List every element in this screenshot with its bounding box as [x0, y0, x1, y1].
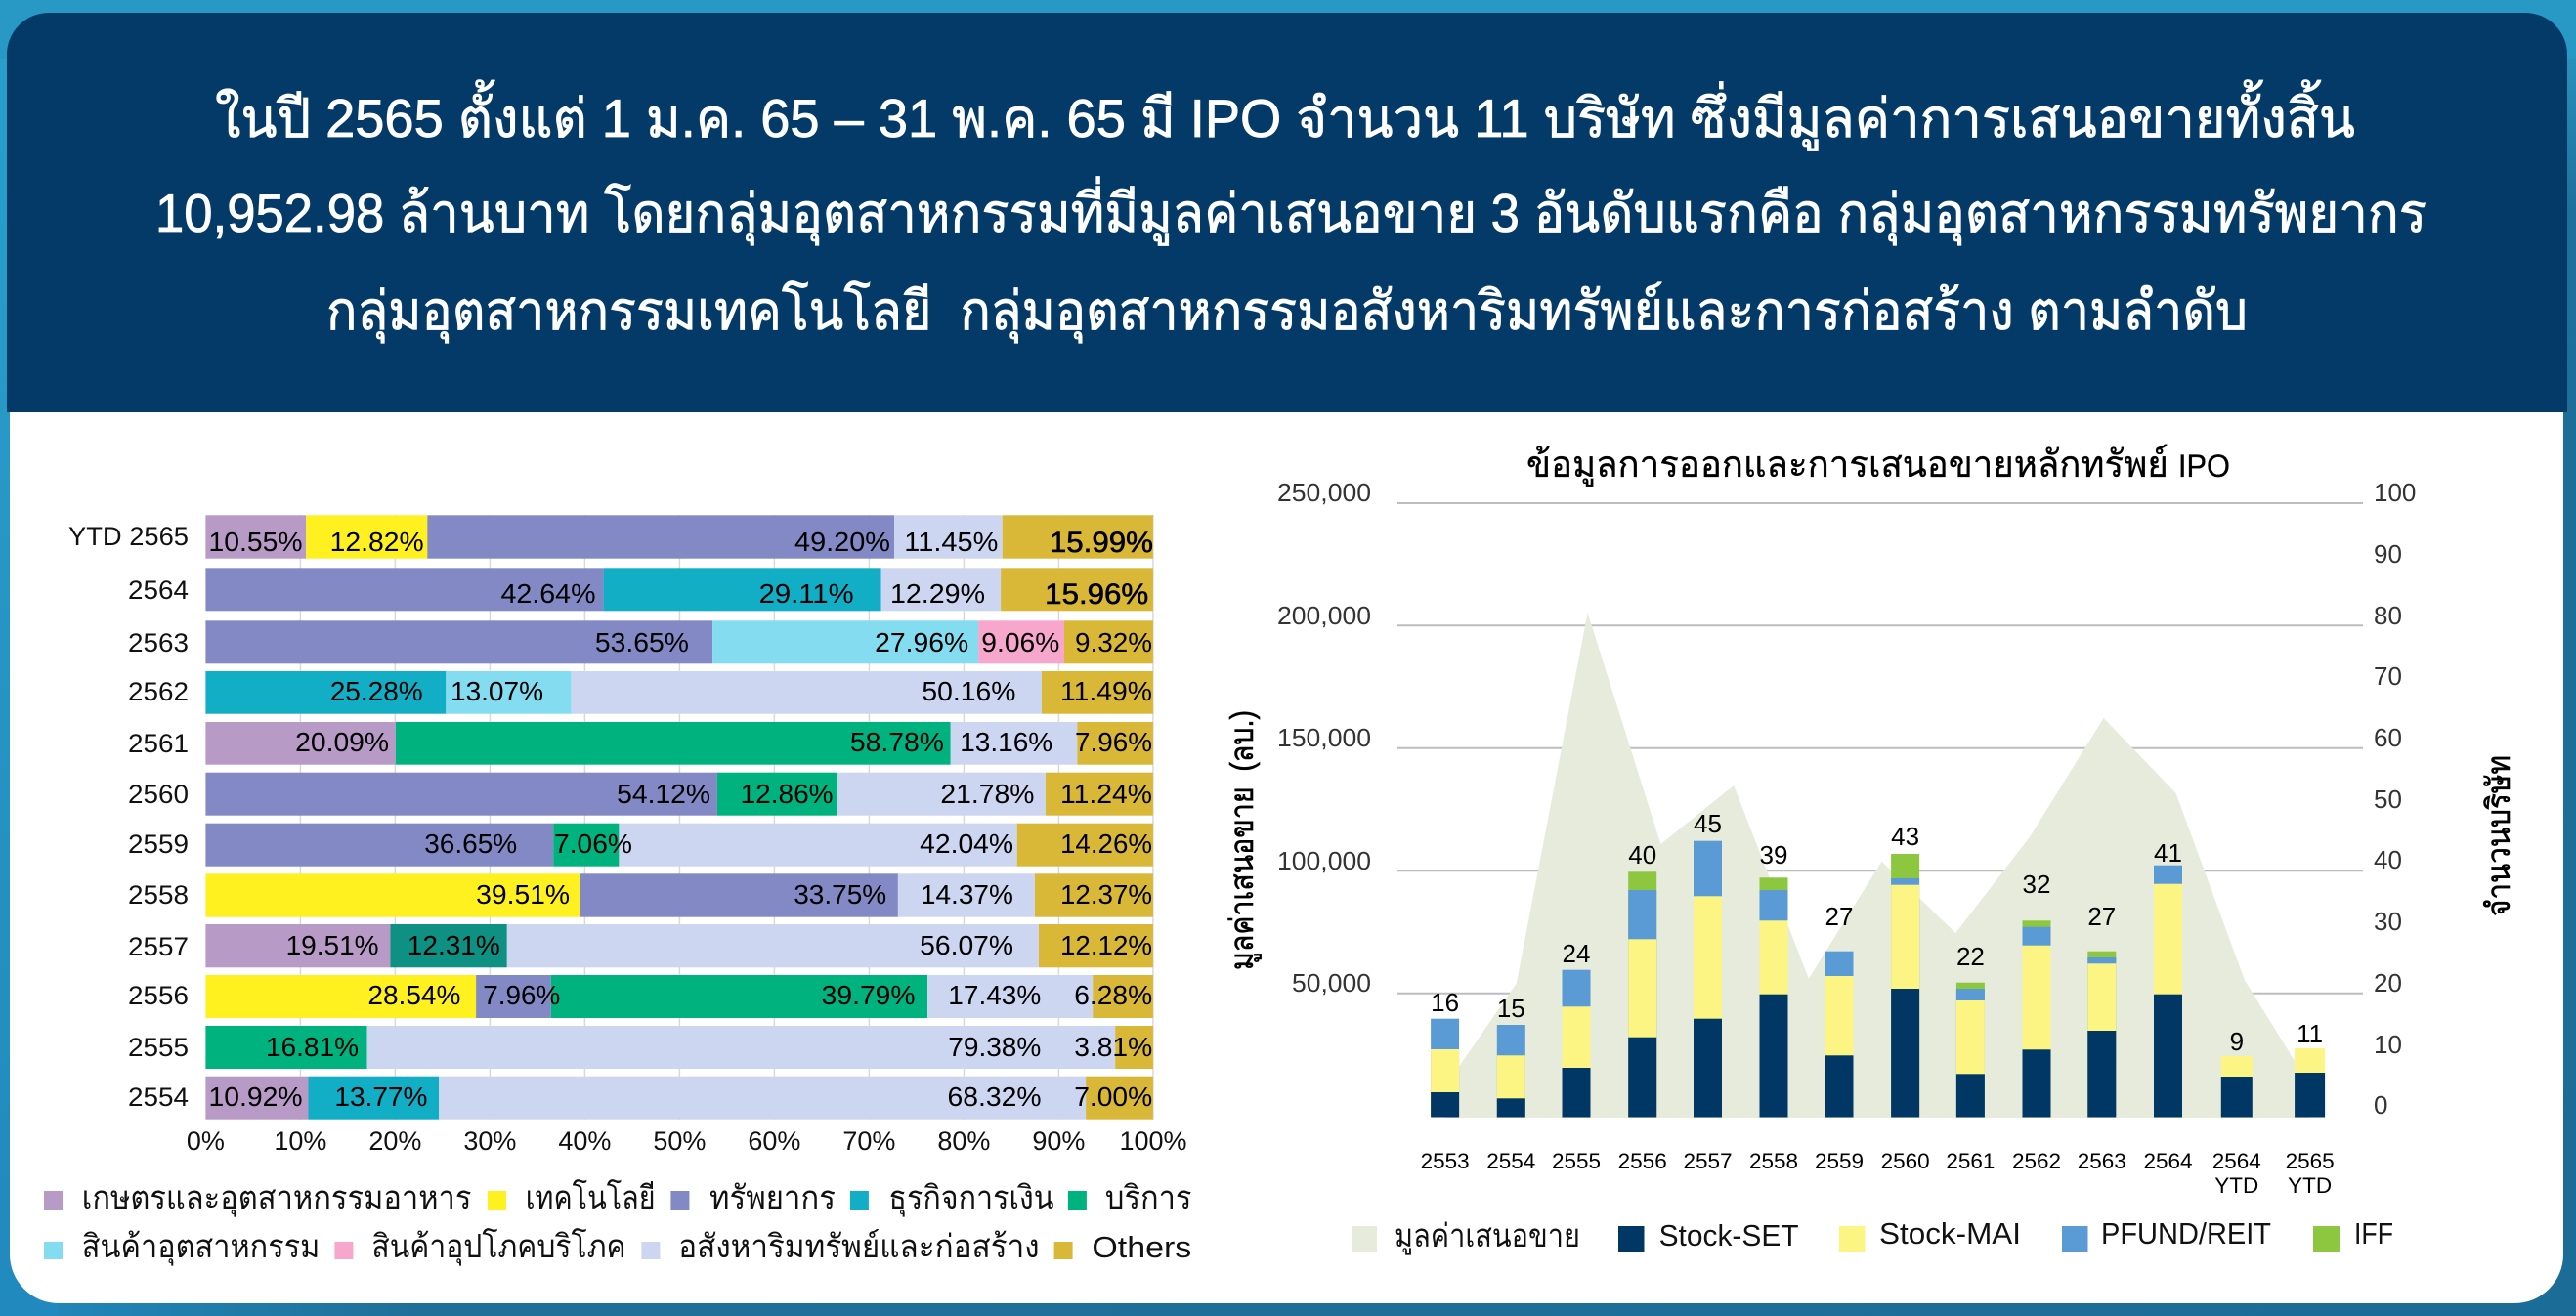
right axis values: 60 [2374, 723, 2402, 752]
bar row YTD 2565: 10.55% [209, 527, 303, 557]
bar row 2563: 9.06% [981, 627, 1059, 658]
x axis percent labels: 80% [937, 1126, 990, 1156]
legend: industry groups: สินค้าอุปโภคบริโภค [371, 1228, 626, 1266]
legend: industry groups: บริการ [1105, 1179, 1192, 1215]
bars: 2562 [2012, 870, 2061, 1173]
right axis values: 30 [2374, 907, 2402, 936]
bars: 2561: 22 [1956, 942, 1985, 971]
bars: 2559 [1815, 902, 1864, 1173]
bars: 2558: 39 [1760, 840, 1787, 870]
bar row 2559 [128, 824, 1153, 867]
bars: 2554: 2554 [1486, 1149, 1535, 1173]
bar row 2558: 2558 [128, 880, 189, 910]
bar row 2563 [128, 620, 1153, 663]
right axis values: 80 [2374, 601, 2402, 630]
bar row 2560: 12.86% [741, 779, 834, 809]
x axis percent labels: 30% [463, 1126, 516, 1156]
bar row 2554: 13.77% [334, 1082, 427, 1112]
bar row 2557: 2557 [128, 932, 189, 961]
bar row 2556: 39.79% [822, 980, 916, 1010]
bar row 2560: 11.24% [1060, 779, 1152, 809]
left axis values: 100,000 [1277, 846, 1371, 875]
bar row YTD 2565 [68, 515, 1153, 559]
bars: 2553: 16 [1431, 988, 1459, 1017]
bar row 2554: 2554 [128, 1083, 189, 1112]
bars: 2564 YTD: 9 [2230, 1027, 2244, 1056]
bar row 2564: 29.11% [759, 578, 854, 609]
legend: industry groups [44, 1179, 1192, 1266]
x axis percent labels: 10% [274, 1126, 326, 1156]
bar row 2556: 28.54% [367, 980, 460, 1010]
bars: 2562: 32 [2023, 870, 2050, 899]
bars: 2554 [1486, 994, 1535, 1173]
bar row 2557: 56.07% [920, 930, 1013, 960]
x axis percent labels: 20% [368, 1126, 421, 1156]
left axis values: 200,000 [1277, 601, 1371, 630]
bars: 2565 YTD: 11 [2297, 1019, 2323, 1048]
area: offering value [1445, 613, 2310, 1118]
bar row 2564: 42.64% [500, 578, 596, 609]
bar row 2556: 6.28% [1074, 980, 1152, 1010]
chart: IPO offering value and number of companies [1224, 478, 2516, 1198]
bars: 2556: 40 [1628, 840, 1656, 870]
right axis values: 20 [2374, 968, 2402, 998]
bars: 2556: 2556 [1618, 1149, 1667, 1173]
legend: offering types: IFF [2354, 1216, 2393, 1251]
x axis percent labels: 0% [187, 1126, 225, 1156]
x axis percent labels: 70% [842, 1126, 895, 1156]
bars: 2563: 2563 [2078, 1149, 2126, 1173]
bar row 2562: 13.07% [451, 676, 543, 706]
right axis values: 40 [2374, 845, 2402, 874]
right axis values: 0 [2374, 1090, 2387, 1120]
bars: 2564 [2143, 838, 2193, 1173]
bar row YTD 2565: 49.20% [794, 527, 890, 557]
y axis title left: มูลค่าเสนอขาย (ลบ.) [1224, 710, 1262, 970]
bar row YTD 2565: YTD 2565 [68, 522, 189, 551]
bar row 2559: 36.65% [424, 828, 517, 859]
left axis values [1277, 478, 1371, 998]
bar row 2556: 7.96% [483, 980, 560, 1010]
bars: 2557: 2557 [1683, 1149, 1733, 1173]
bar row 2560 [128, 773, 1153, 816]
bars: 2564 YTD: 2564 [2212, 1149, 2261, 1173]
legend: offering types: Stock-SET [1659, 1218, 1799, 1252]
legend: offering types: Stock-MAI [1879, 1216, 2021, 1251]
bar row 2558: 33.75% [794, 879, 886, 910]
bars: 2563 [2078, 902, 2126, 1173]
bars: 2556 [1618, 840, 1667, 1173]
heading line 3: กลุ่มอุตสาหกรรมเทคโนโลยี กลุ่มอุตสาหกรรมอสังหาริมทรัพย์และการก่อสร้าง ตามลำดับ [326, 280, 2248, 344]
bar row 2561: 2561 [128, 729, 189, 758]
legend: industry groups: อสังหาริมทรัพย์และก่อสร้าง [678, 1228, 1040, 1264]
legend: industry groups: Others [1092, 1230, 1191, 1264]
bar row 2561: 7.96% [1075, 727, 1152, 757]
bar row 2563: 53.65% [595, 627, 689, 658]
bars: 2564: 41 [2154, 838, 2182, 868]
bar row 2555: 2555 [128, 1033, 189, 1062]
bar row 2558: 14.37% [921, 879, 1013, 910]
right axis values: 70 [2374, 661, 2402, 691]
bars: 2557 [1683, 809, 1733, 1173]
bars: 2564 YTD: YTD [2214, 1173, 2258, 1198]
bar row 2561 [128, 722, 1153, 765]
bars: 2565 YTD: YTD [2288, 1173, 2332, 1198]
bar row 2563: 2563 [128, 628, 189, 658]
bar row 2560: 21.78% [940, 779, 1034, 809]
right axis values: 10 [2374, 1030, 2402, 1059]
bar row 2557: 19.51% [286, 930, 379, 960]
bars: 2553 [1421, 988, 1470, 1173]
bars: 2560: 43 [1891, 822, 1919, 851]
chart title: IPO issuance and offering: ข้อมูลการออกและการเสนอขายหลักทรัพย์ IPO [1526, 444, 2230, 487]
bars: 2562: 2562 [2012, 1149, 2061, 1173]
right axis values: 90 [2374, 539, 2402, 569]
bars: 2564 YTD [2212, 1027, 2261, 1198]
bar row 2564: 15.96% [1045, 578, 1148, 611]
bar row 2556: 17.43% [948, 980, 1041, 1010]
bar row 2559: 14.26% [1060, 828, 1152, 859]
bar row 2558: 39.51% [476, 879, 570, 910]
bar row 2555: 3.81% [1074, 1032, 1152, 1062]
bar row 2556 [128, 975, 1153, 1018]
chart: 100% stacked bar of IPO value by industry [68, 515, 1187, 1156]
bars: 2565 YTD [2286, 1019, 2335, 1198]
bar row 2561: 58.78% [850, 727, 944, 757]
bars: 2565 YTD: 2565 [2286, 1149, 2335, 1173]
legend: offering types: PFUND/REIT [2101, 1216, 2271, 1251]
bar row 2560: 54.12% [617, 779, 710, 809]
bar row 2562: 11.49% [1060, 676, 1152, 706]
bar row 2557: 12.31% [408, 930, 500, 960]
bar row 2557 [128, 924, 1153, 967]
bar row 2556: 2556 [128, 981, 189, 1010]
bar row 2555 [128, 1026, 1153, 1069]
bars: 2559: 27 [1825, 902, 1853, 931]
bar row 2558: 12.37% [1060, 879, 1152, 910]
heading line 1: ในปี 2565 ตั้งแต่ 1 ม.ค. 65 – 31 พ.ค. 65 มี IPO จำนวน 11 บริษัท ซึ่งมีมูลค่าการเสนอขายทั้งสิ้น [215, 80, 2355, 151]
bar row 2564: 12.29% [890, 578, 985, 609]
bars: 2560: 2560 [1881, 1149, 1930, 1173]
bar row 2561: 13.16% [960, 727, 1052, 757]
x axis percent labels: 60% [748, 1126, 800, 1156]
bar row 2555: 79.38% [948, 1032, 1041, 1062]
bar row 2563: 27.96% [875, 627, 968, 658]
bar row YTD 2565: 15.99% [1050, 527, 1153, 559]
left axis values: 50,000 [1292, 968, 1371, 998]
bar row 2562: 2562 [128, 677, 189, 706]
bar row YTD 2565: 11.45% [904, 527, 998, 557]
x axis percent labels: 40% [558, 1126, 611, 1156]
bars: 2563: 27 [2087, 902, 2116, 931]
y axis title right: จำนวนบริษัท [2480, 755, 2516, 916]
bars: 2561: 2561 [1946, 1149, 1995, 1173]
bar row 2554: 68.32% [948, 1082, 1042, 1112]
bars: 2561 [1946, 942, 1995, 1173]
bar row 2554 [128, 1077, 1153, 1120]
heading line 2: 10,952.98 ล้านบาท โดยกลุ่มอุตสาหกรรมที่มีมูลค่าเสนอขาย 3 อันดับแรกคือ กลุ่มอุตสาหกรรมทรัพยากร [155, 176, 2426, 246]
bars: 2557: 45 [1694, 809, 1722, 838]
x axis percent labels: 100% [1119, 1126, 1187, 1156]
bar row 2554: 10.92% [209, 1082, 303, 1112]
bar row 2557: 12.12% [1060, 930, 1152, 960]
bar row 2562 [128, 671, 1153, 714]
bar row 2555: 16.81% [266, 1032, 359, 1062]
bar row 2564: 2564 [128, 575, 189, 605]
bar row 2564 [128, 568, 1153, 611]
x axis percent labels: 50% [653, 1126, 706, 1156]
bar row 2562: 25.28% [330, 676, 423, 706]
bars: 2555 [1552, 939, 1601, 1173]
right axis values: 100 [2374, 478, 2416, 507]
bar row 2559: 42.04% [920, 828, 1013, 859]
legend: industry groups: ทรัพยากร [709, 1179, 836, 1215]
bars: 2558 [1749, 840, 1798, 1173]
bar row 2558 [128, 873, 1153, 917]
legend: offering types: มูลค่าเสนอขาย [1395, 1217, 1580, 1255]
bar row 2559: 7.06% [554, 828, 632, 859]
left axis values: 250,000 [1277, 478, 1371, 507]
legend: industry groups: เทคโนโลยี [526, 1179, 656, 1215]
bar row 2554: 7.00% [1074, 1082, 1152, 1112]
bar row 2561: 20.09% [295, 727, 389, 757]
bar row 2562: 50.16% [922, 676, 1015, 706]
bars: 2554: 15 [1497, 994, 1525, 1023]
x axis percent labels: 90% [1032, 1126, 1085, 1156]
bar row 2560: 2560 [128, 780, 189, 809]
left axis values: 150,000 [1277, 723, 1371, 752]
bar row 2563: 9.32% [1075, 627, 1152, 658]
panel: white content card [10, 391, 2563, 1303]
right axis values [2374, 478, 2416, 1120]
bars: 2558: 2558 [1749, 1149, 1798, 1173]
x axis percent labels [187, 1126, 1187, 1156]
bars: 2553: 2553 [1421, 1149, 1470, 1173]
panel: header banner [7, 13, 2567, 412]
legend: industry groups: สินค้าอุตสาหกรรม [82, 1228, 320, 1266]
bars: 2555: 2555 [1552, 1149, 1601, 1173]
bars: 2564: 2564 [2143, 1149, 2193, 1173]
bar row YTD 2565: 12.82% [330, 527, 424, 557]
bars: 2560 [1881, 822, 1930, 1173]
legend: industry groups: ธุรกิจการเงิน [888, 1179, 1054, 1217]
right axis values: 50 [2374, 785, 2402, 814]
legend: industry groups: เกษตรและอุตสาหกรรมอาหาร [82, 1179, 471, 1217]
bars: 2555: 24 [1563, 939, 1590, 968]
bar row 2559: 2559 [128, 829, 189, 859]
legend: offering types [1352, 1216, 2393, 1255]
bars: 2559: 2559 [1815, 1149, 1864, 1173]
